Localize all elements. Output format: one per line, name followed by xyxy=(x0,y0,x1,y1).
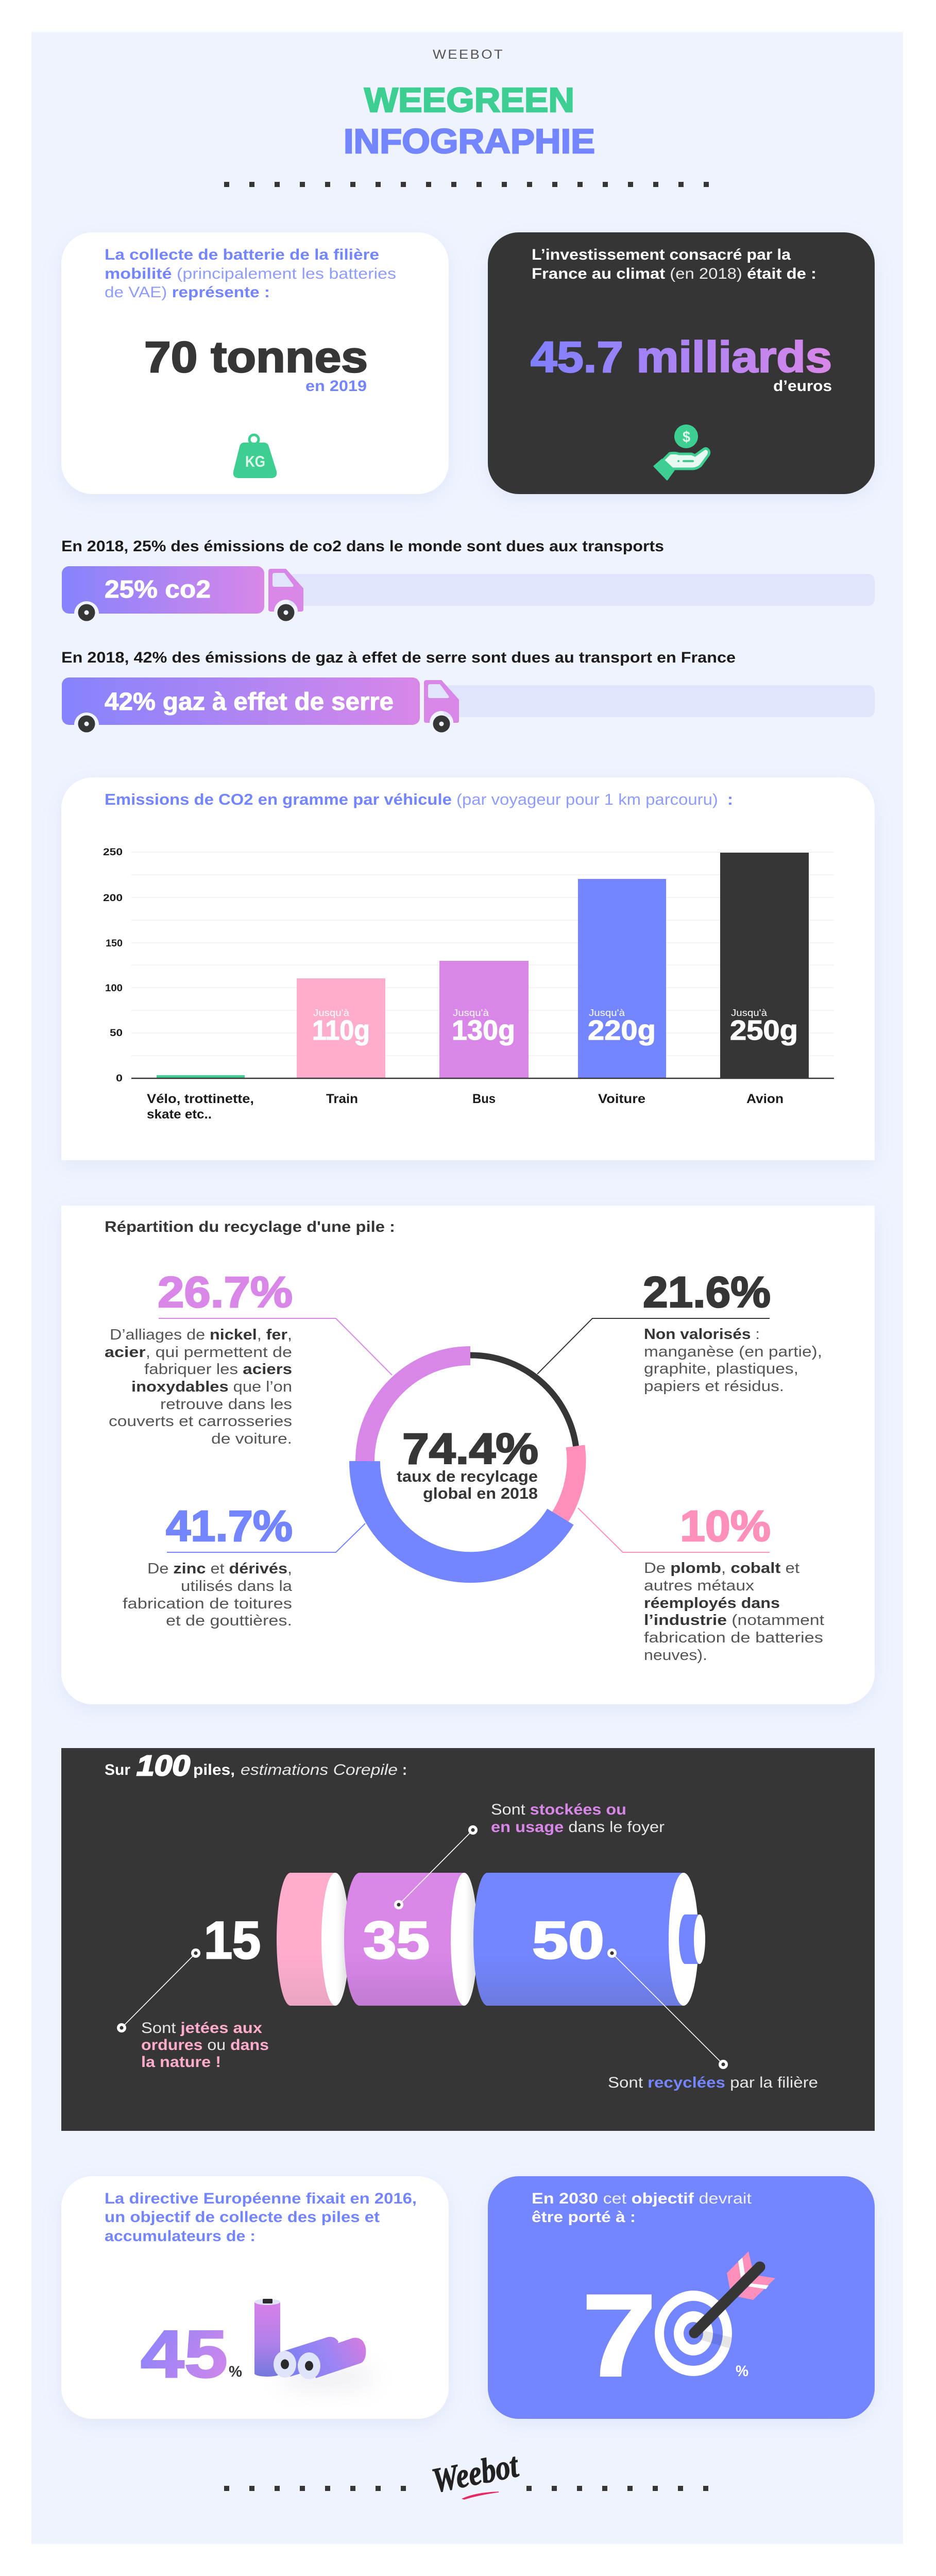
callout: 26.7%: inoxydables que l’on xyxy=(131,1379,292,1395)
directive description: La directive Européenne fixait en 2016, xyxy=(105,2190,417,2207)
figure: 7: 7 xyxy=(582,2270,656,2400)
bar: voiture: 220g xyxy=(588,1015,656,1046)
callout: 21.6%: graphite, plastiques, xyxy=(644,1361,798,1377)
label: jetees xyxy=(141,2020,269,2071)
percent sign: % xyxy=(736,2363,748,2380)
bar: voiture: Jusqu'à xyxy=(589,1008,625,1018)
figure: 45: 45 xyxy=(141,2316,228,2392)
panel: co2 emissions per vehicle xyxy=(61,777,875,1160)
dotted divider right xyxy=(526,2486,709,2491)
y axis labels: 100 xyxy=(105,983,123,994)
category labels: Vélo, trottinette, xyxy=(147,1092,254,1106)
title: infographie: INFOGRAPHIE xyxy=(344,122,595,161)
transport greenhouse gas statistic xyxy=(61,649,875,733)
category labels xyxy=(147,1092,784,1122)
label: jetees: Sont jetées aux xyxy=(141,2020,262,2037)
label: recyclees: Sont recyclées par la filière xyxy=(608,2074,818,2091)
collecte description xyxy=(105,246,396,301)
icon: hand and coin: $ xyxy=(683,429,690,446)
panel heading xyxy=(105,1749,407,1782)
progress track xyxy=(443,685,875,717)
icon: hand and coin xyxy=(654,425,709,480)
bar: train: 110g xyxy=(312,1015,370,1046)
callout: 10%: neuves). xyxy=(644,1647,707,1664)
heading: 25% transports: En 2018, 25% des émissions de co2 dans le monde sont dues aux transports xyxy=(61,538,664,555)
illustration: batteries xyxy=(254,2299,376,2392)
callout: 26.7%: fabriquer les aciers xyxy=(144,1361,292,1378)
progress track xyxy=(288,574,875,606)
bar: voiture xyxy=(578,879,666,1078)
callout: 41.7%: utilisés dans la xyxy=(181,1578,293,1595)
bar: bus: 130g xyxy=(452,1015,515,1046)
collecte description: de VAE) représente : xyxy=(105,284,270,301)
callout: 41.7%: fabrication de toitures xyxy=(123,1596,292,1612)
panel heading: Sur xyxy=(105,1761,130,1778)
truck cab xyxy=(424,680,459,723)
objectif description: être porté à : xyxy=(532,2209,636,2226)
figure: 45.7 milliards: 45.7 milliards xyxy=(531,333,832,381)
y axis labels: 150 xyxy=(106,938,123,949)
callout: 10%: De plomb , cobalt et xyxy=(644,1560,799,1577)
category labels: Train xyxy=(326,1092,358,1106)
wheels xyxy=(78,715,450,733)
callout: 26.7%: retrouve dans les xyxy=(160,1396,292,1413)
percent sign: % xyxy=(229,2363,242,2380)
callout: 10%: 10% xyxy=(680,1502,771,1550)
dotted divider left xyxy=(224,2486,406,2491)
investissement description xyxy=(532,246,816,282)
number 35: 35 xyxy=(363,1911,430,1970)
truck trailer bar xyxy=(62,677,420,725)
weebot logo: Weebot xyxy=(429,2445,522,2500)
panel: collecte 70 tonnes xyxy=(61,232,449,494)
directive description: un objectif de collecte des piles et xyxy=(105,2209,380,2226)
callout: 26.7%: 26.7% xyxy=(158,1268,293,1316)
label: stockees: Sont stockées ou xyxy=(491,1801,626,1818)
donut centre figure: global en 2018 xyxy=(423,1484,538,1502)
y axis labels: 50 xyxy=(110,1028,123,1039)
investissement description: France au climat (en 2018) était de : xyxy=(532,265,816,282)
panel: battery recycling breakdown xyxy=(61,1206,875,1704)
y axis labels: 0 xyxy=(116,1073,123,1084)
callout: 10%: autres métaux xyxy=(644,1578,755,1594)
wheels xyxy=(78,604,295,621)
label: stockees xyxy=(491,1801,665,1836)
bar: train xyxy=(297,978,385,1078)
segment: purple 35 xyxy=(344,1873,478,2006)
segment: blue 50 xyxy=(473,1873,705,2006)
callout: 21.6% xyxy=(537,1268,822,1395)
category labels: Avion xyxy=(746,1092,784,1106)
truck cab xyxy=(268,569,303,612)
callout: 10%: fabrication de batteries xyxy=(644,1630,823,1646)
heading: 42% transport: En 2018, 42% des émissions de gaz à effet de serre sont dues au transport en France xyxy=(61,649,736,666)
panel heading: : xyxy=(402,1761,407,1778)
category labels: skate etc.. xyxy=(147,1107,212,1122)
panel: on 100 batteries xyxy=(61,1748,875,2131)
callout: 21.6%: 21.6% xyxy=(643,1268,771,1316)
objectif description: En 2030 cet objectif devrait xyxy=(532,2190,752,2207)
d'euros: d’euros xyxy=(773,378,832,395)
callout: 21.6%: papiers et résidus. xyxy=(644,1378,784,1395)
icon: weight kg xyxy=(233,435,277,478)
callout: 41.7%: 41.7% xyxy=(166,1502,293,1550)
bar label: 42% gaz a effet de serre: 42% gaz à effet de serre xyxy=(105,688,394,716)
panel heading: piles, xyxy=(193,1761,235,1778)
directive description: accumulateurs de : xyxy=(105,2228,256,2245)
leader lines and markers xyxy=(117,1825,728,2069)
segment: pink 15 xyxy=(277,1873,349,2006)
battery illustration xyxy=(277,1873,705,2006)
label: stockees: en usage dans le foyer xyxy=(491,1819,665,1836)
directive description xyxy=(105,2190,417,2245)
panel heading: estimations Corepile xyxy=(241,1761,398,1778)
category labels: Voiture xyxy=(598,1092,645,1106)
icon: weight kg: KG xyxy=(245,452,265,470)
donut centre figure: 74.4% xyxy=(402,1425,538,1473)
bar: avion: 250g xyxy=(730,1015,798,1046)
donut centre figure: taux de recylcage xyxy=(397,1467,538,1485)
number 15: 15 xyxy=(204,1911,261,1970)
callout: 41.7% xyxy=(123,1502,365,1629)
callout: 10%: réemployés dans xyxy=(644,1595,780,1612)
truck trailer bar xyxy=(62,566,264,614)
y axis labels: 200 xyxy=(103,893,123,904)
bar: bus xyxy=(439,961,529,1078)
panel: objectif 2030 70% xyxy=(488,2176,875,2419)
panel: investissement 45.7 milliards xyxy=(488,232,875,494)
bar chart xyxy=(103,847,834,1122)
callout: 10% xyxy=(578,1502,824,1664)
bar: avion: Jusqu'à xyxy=(731,1008,768,1018)
icon: target with arrow xyxy=(655,2251,775,2376)
callout: 41.7%: De zinc et dérivés , xyxy=(147,1561,292,1577)
panel heading: 100 xyxy=(137,1749,190,1782)
donut chart xyxy=(365,1355,576,1567)
dotted divider xyxy=(224,182,709,187)
investissement description: L’investissement consacré par la xyxy=(532,246,791,263)
y axis labels: 250 xyxy=(103,847,123,858)
callout: 26.7% xyxy=(105,1268,392,1447)
objectif description xyxy=(532,2190,752,2226)
brand label: WEEBOT xyxy=(433,47,504,62)
callout: 26.7%: acier , qui permettent de xyxy=(105,1344,292,1361)
footer xyxy=(224,2445,709,2500)
label: jetees: ordures ou dans xyxy=(141,2037,269,2054)
bar: avion xyxy=(720,853,809,1078)
donut centre figure xyxy=(397,1425,538,1502)
transport co2 statistic xyxy=(61,538,875,621)
collecte description: mobilité (principalement les batteries xyxy=(105,265,396,282)
panel: directive 45% xyxy=(61,2176,449,2419)
figure: 70 tonnes: 70 tonnes xyxy=(144,333,368,381)
callout: 26.7%: couverts et carrosseries xyxy=(109,1413,292,1430)
bar: bus: Jusqu'à xyxy=(453,1008,489,1018)
recycling heading: Répartition du recyclage d'une pile : xyxy=(105,1218,395,1235)
collecte description: La collecte de batterie de la filière xyxy=(105,246,379,263)
number 50: 50 xyxy=(532,1911,604,1970)
callout: 10%: l’industrie (notamment xyxy=(644,1612,824,1629)
callout: 26.7%: D’alliages de nickel , fer, xyxy=(110,1327,292,1343)
bar: velo xyxy=(157,1075,245,1078)
bar: train: Jusqu'à xyxy=(313,1008,350,1018)
title: weegreen: WEEGREEN xyxy=(364,81,574,120)
callout: 41.7%: et de gouttières. xyxy=(166,1613,292,1629)
y axis labels xyxy=(103,847,123,1084)
callout: 21.6%: Non valorisés : xyxy=(644,1326,760,1343)
bar label: 25% co2: 25% co2 xyxy=(105,576,211,603)
callout: 26.7%: de voiture. xyxy=(211,1431,292,1447)
header xyxy=(224,47,709,184)
label: jetees: la nature ! xyxy=(141,2054,221,2071)
callout: 21.6%: manganèse (en partie), xyxy=(644,1344,822,1360)
en 2019: en 2019 xyxy=(305,378,367,395)
chart heading: Emissions de CO2 en gramme par véhicule (par voyageur pour 1 km parcouru) : xyxy=(105,790,733,808)
category labels: Bus xyxy=(472,1092,496,1106)
